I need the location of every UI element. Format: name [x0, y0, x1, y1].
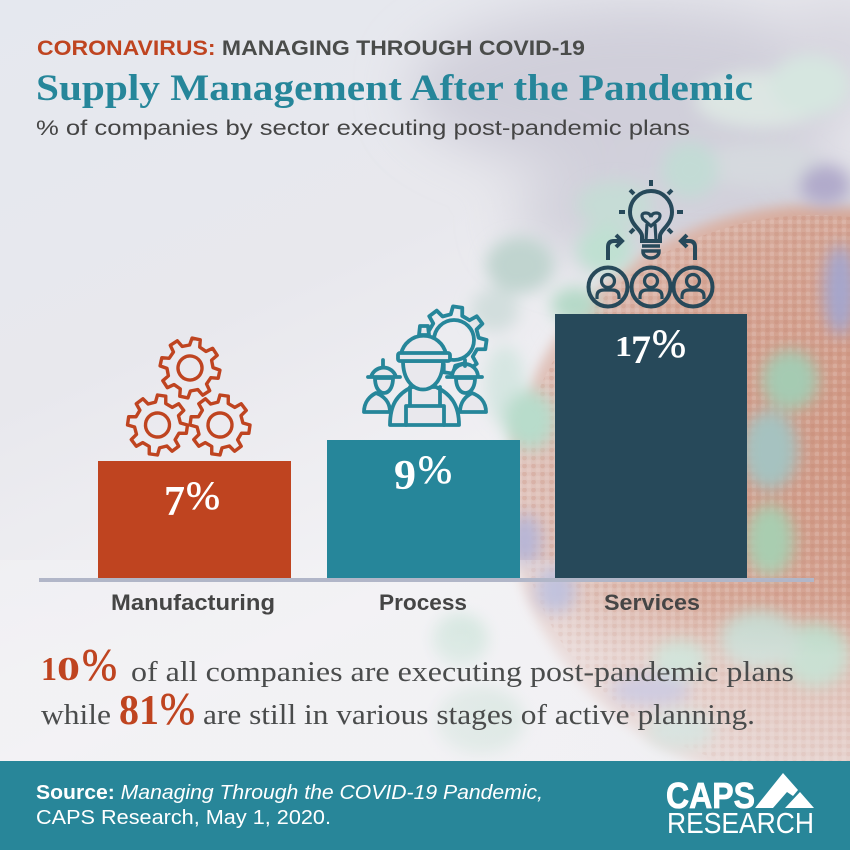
bar: services: 1 — [615, 331, 632, 363]
header: section label: CORONAVIRUS: MANAGING THROUGH COVID-19 — [37, 37, 585, 60]
callout text: 0 — [57, 651, 80, 688]
icon: workers and gear — [364, 302, 491, 425]
bar: process: 9 — [394, 453, 416, 499]
callout text: are still in various stages of active planning. — [203, 699, 755, 731]
axis labels: Services — [604, 590, 700, 615]
icon: lightbulb and people — [588, 180, 712, 306]
bar: manufacturing — [98, 461, 291, 578]
bar: services — [555, 314, 747, 578]
axis labels — [111, 590, 700, 615]
bar: process: % — [418, 447, 452, 492]
callout text: while — [41, 699, 111, 731]
bar: services: 7 — [631, 327, 651, 372]
source text — [36, 781, 543, 829]
callout text — [41, 639, 794, 734]
callout text: 1 — [41, 651, 57, 688]
bar: manufacturing: % — [186, 473, 220, 518]
footer band — [0, 761, 850, 850]
bar: manufacturing: 7 — [164, 479, 185, 525]
center worker — [390, 387, 459, 425]
left worker — [364, 393, 390, 412]
callout text: % — [82, 639, 117, 690]
callout text: 81 — [119, 688, 159, 734]
logo: CAPS Research: CAPS — [666, 775, 755, 816]
callout text: % — [160, 683, 195, 734]
right worker — [460, 393, 486, 412]
axis labels: Process — [379, 590, 467, 615]
axis labels: Manufacturing — [111, 590, 275, 615]
bar: services: % — [652, 321, 686, 366]
logo: CAPS Research: RESEARCH — [667, 808, 814, 840]
logo: CAPS Research — [666, 773, 814, 840]
icon: three gears — [124, 333, 254, 459]
bar: process — [327, 440, 520, 578]
callout text: of all companies are executing post-pandemic plans — [131, 656, 794, 688]
title: Supply Management After the Pandemic — [36, 68, 753, 109]
axis line — [39, 578, 814, 582]
subtitle: % of companies by sector executing post-pandemic plans — [36, 116, 690, 140]
source text: Source: Managing Through the COVID-19 Pandemic, — [36, 781, 543, 804]
source text: CAPS Research, May 1, 2020. — [36, 806, 331, 829]
